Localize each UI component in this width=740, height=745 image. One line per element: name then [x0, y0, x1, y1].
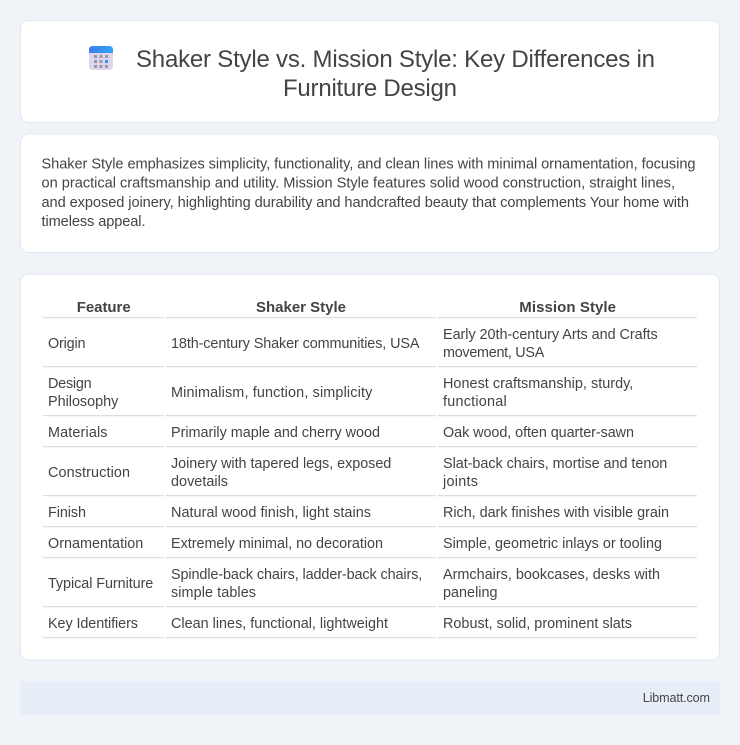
- row: ornamentation: Ornamentation: [48, 536, 143, 552]
- title: Furniture Design: [283, 75, 457, 102]
- table header: Shaker Style: [256, 299, 346, 316]
- row: finish: [48, 505, 669, 521]
- row: origin: Origin: [48, 336, 86, 352]
- row: typical furniture: Armchairs, bookcases, desks with: [443, 567, 660, 583]
- footer bar: [20, 681, 720, 715]
- row: design philosophy: functional: [443, 394, 507, 410]
- panel: comparison table: [20, 274, 720, 660]
- table header: [77, 299, 616, 316]
- row: construction: [48, 456, 667, 490]
- row: key identifiers: Clean lines, functional, lightweight: [171, 616, 388, 632]
- row: design philosophy: [48, 376, 633, 410]
- intro paragraph: on practical craftsmanship and utility. Mission Style features solid wood construction, straight lines,: [42, 176, 675, 192]
- row: origin: Early 20th-century Arts and Crafts: [443, 327, 658, 343]
- intro paragraph: Shaker Style emphasizes simplicity, functionality, and clean lines with minimal ornamentation, focusing: [42, 156, 696, 172]
- row: typical furniture: [48, 567, 660, 601]
- row: finish: Rich, dark finishes with visible grain: [443, 505, 669, 521]
- row: materials: Oak wood, often quarter-sawn: [443, 425, 634, 441]
- table header: Mission Style: [519, 299, 616, 316]
- row: ornamentation: Extremely minimal, no decoration: [171, 536, 383, 552]
- icon: calendar: [89, 46, 113, 70]
- intro paragraph: [42, 156, 696, 230]
- row: finish: Natural wood finish, light stains: [171, 505, 371, 521]
- panel: title card: [20, 20, 720, 122]
- panel: intro text: [20, 134, 720, 252]
- row: typical furniture: Spindle-back chairs, ladder-back chairs,: [171, 567, 422, 583]
- row: design philosophy: Design: [48, 376, 92, 392]
- row: origin: movement, USA: [443, 345, 545, 361]
- row: construction: Construction: [48, 465, 130, 481]
- row: typical furniture: Typical Furniture: [48, 576, 153, 592]
- row: typical furniture: paneling: [443, 585, 498, 601]
- row: finish: Finish: [48, 505, 86, 521]
- row: origin: [48, 327, 658, 361]
- row: materials: [48, 425, 634, 441]
- row: key identifiers: [48, 616, 632, 632]
- row: construction: dovetails: [171, 474, 228, 490]
- row: design philosophy: Honest craftsmanship, sturdy,: [443, 376, 633, 392]
- row: materials: Materials: [48, 425, 108, 441]
- footer credit: Libmatt.com: [643, 691, 710, 705]
- row: typical furniture: simple tables: [171, 585, 256, 601]
- table header: Feature: [77, 299, 131, 316]
- row: ornamentation: [48, 536, 662, 552]
- row: key identifiers: Key Identifiers: [48, 616, 138, 632]
- row: construction: Joinery with tapered legs, exposed: [171, 456, 391, 472]
- title: Shaker Style vs. Mission Style: Key Differences in: [136, 46, 655, 73]
- title: [136, 46, 655, 102]
- row: design philosophy: Philosophy: [48, 394, 119, 410]
- row: construction: joints: [442, 474, 478, 490]
- intro paragraph: and exposed joinery, highlighting durability and handcrafted beauty that complements Your home with: [42, 195, 689, 211]
- row: materials: Primarily maple and cherry wood: [171, 425, 380, 441]
- intro paragraph: timeless appeal.: [42, 214, 146, 230]
- row: design philosophy: Minimalism, function, simplicity: [171, 385, 373, 401]
- row: key identifiers: Robust, solid, prominent slats: [443, 616, 632, 632]
- row: construction: Slat-back chairs, mortise and tenon: [443, 456, 667, 472]
- row: origin: 18th-century Shaker communities, USA: [171, 336, 420, 352]
- row: ornamentation: Simple, geometric inlays or tooling: [443, 536, 662, 552]
